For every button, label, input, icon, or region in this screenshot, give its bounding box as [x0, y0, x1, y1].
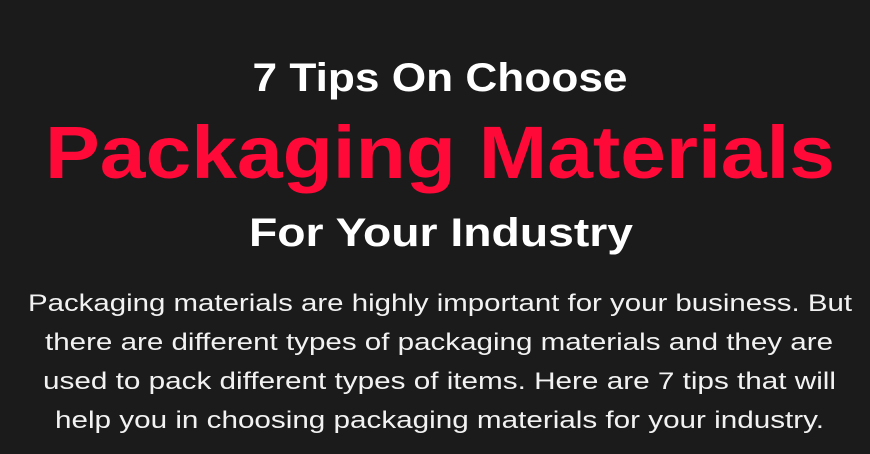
title line 3: For Your Industry	[249, 211, 634, 255]
intro paragraph: used to pack different types of items. Here are 7 tips that will	[43, 368, 836, 395]
intro paragraph: Packaging materials are highly important for your business. But	[28, 290, 852, 317]
title line 1: 7 Tips On Choose	[252, 56, 628, 100]
intro paragraph	[28, 290, 852, 434]
intro paragraph: there are different types of packaging materials and they are	[45, 329, 833, 356]
intro paragraph: help you in choosing packaging materials for your industry.	[55, 407, 824, 434]
title main red: Packaging Materials	[45, 111, 835, 194]
